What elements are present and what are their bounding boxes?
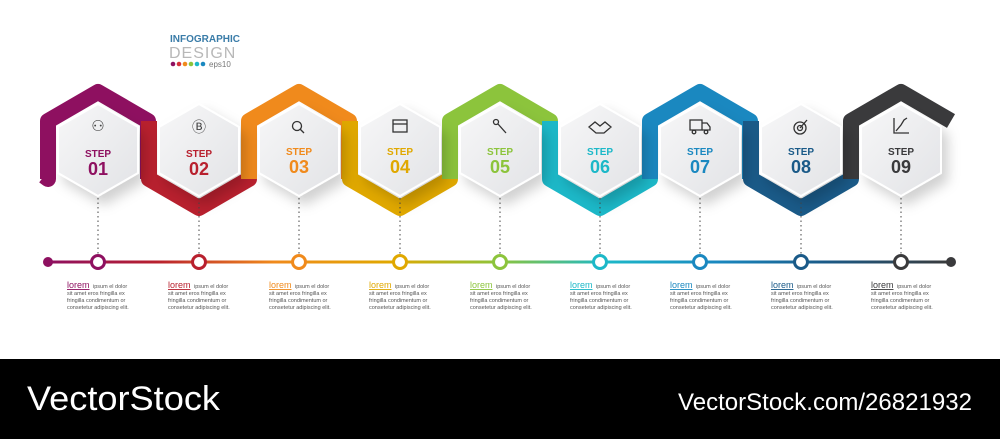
step 8: fringilla condimentum or [771, 298, 830, 304]
step 4: 04 [390, 157, 410, 177]
step 2: consetetur adipiscing elit. [168, 305, 230, 311]
ribbon [44, 92, 951, 208]
step 6: sit amet eros fringilla ex [570, 291, 628, 297]
step 1: ⚇ [91, 118, 105, 135]
step 6: consetetur adipiscing elit. [570, 305, 632, 311]
logo [169, 34, 240, 69]
step 1: consetetur adipiscing elit. [67, 305, 129, 311]
step 2: fringilla condimentum or [168, 298, 227, 304]
logo: DESIGN [169, 45, 236, 62]
step 9: fringilla condimentum or [871, 298, 930, 304]
step 2 [159, 104, 239, 311]
step 7: 07 [690, 157, 710, 177]
step 7: sit amet eros fringilla ex [670, 291, 728, 297]
step 5: STEP [487, 147, 513, 158]
step 7 [660, 104, 740, 311]
step 2: STEP [186, 149, 212, 160]
step 8: STEP [788, 147, 814, 158]
footer: VectorStock.com/26821932 [678, 389, 972, 416]
step 1: STEP [85, 149, 111, 160]
step 7: STEP [687, 147, 713, 158]
step 3: fringilla condimentum or [269, 298, 328, 304]
step 9 [861, 104, 941, 311]
step 8: ipsum el dolor [797, 284, 831, 290]
step 4: lorem [369, 280, 392, 290]
step 3: sit amet eros fringilla ex [269, 291, 327, 297]
step 2: ipsum el dolor [194, 284, 228, 290]
step 9: sit amet eros fringilla ex [871, 291, 929, 297]
step 1: fringilla condimentum or [67, 298, 126, 304]
step 5 [460, 104, 540, 311]
step 7: lorem [670, 280, 693, 290]
step 9: STEP [888, 147, 914, 158]
step 9: 09 [891, 157, 911, 177]
step 9: consetetur adipiscing elit. [871, 305, 933, 311]
step 3: consetetur adipiscing elit. [269, 305, 331, 311]
step 4 [360, 104, 440, 311]
step 7: fringilla condimentum or [670, 298, 729, 304]
step 8: lorem [771, 280, 794, 290]
step 2: Ⓑ [192, 119, 206, 135]
step 5: consetetur adipiscing elit. [470, 305, 532, 311]
step 2: sit amet eros fringilla ex [168, 291, 226, 297]
step 1: lorem [67, 280, 90, 290]
step 5: lorem [470, 280, 493, 290]
step 7: consetetur adipiscing elit. [670, 305, 732, 311]
step 5: sit amet eros fringilla ex [470, 291, 528, 297]
footer: VectorStock [27, 380, 221, 418]
step 3: STEP [286, 147, 312, 158]
step 5: 05 [490, 157, 510, 177]
step 6 [560, 104, 640, 311]
step 3: 03 [289, 157, 309, 177]
step 1: ipsum el dolor [93, 284, 127, 290]
footer [0, 359, 1000, 439]
step 2: 02 [189, 159, 209, 179]
step 3: ipsum el dolor [295, 284, 329, 290]
step 9: lorem [871, 280, 894, 290]
step 1: 01 [88, 159, 108, 179]
step 6: ipsum el dolor [596, 284, 630, 290]
step 2: lorem [168, 280, 191, 290]
step 4: ipsum el dolor [395, 284, 429, 290]
timeline [43, 257, 956, 267]
step 3 [259, 104, 339, 311]
step 6: 06 [590, 157, 610, 177]
step 4: sit amet eros fringilla ex [369, 291, 427, 297]
step 9: ipsum el dolor [897, 284, 931, 290]
step 4: consetetur adipiscing elit. [369, 305, 431, 311]
step 6: lorem [570, 280, 593, 290]
step 1: sit amet eros fringilla ex [67, 291, 125, 297]
step 7: ipsum el dolor [696, 284, 730, 290]
step 4: fringilla condimentum or [369, 298, 428, 304]
step 6: fringilla condimentum or [570, 298, 629, 304]
logo: INFOGRAPHIC [170, 34, 240, 45]
step 3: lorem [269, 280, 292, 290]
step 5: fringilla condimentum or [470, 298, 529, 304]
step 6: STEP [587, 147, 613, 158]
step 8: consetetur adipiscing elit. [771, 305, 833, 311]
logo: eps10 [209, 60, 231, 69]
step 4: STEP [387, 147, 413, 158]
step 1 [58, 104, 138, 311]
step 5: ipsum el dolor [496, 284, 530, 290]
step 8: sit amet eros fringilla ex [771, 291, 829, 297]
step 8: 08 [791, 157, 811, 177]
step 8 [761, 104, 841, 311]
